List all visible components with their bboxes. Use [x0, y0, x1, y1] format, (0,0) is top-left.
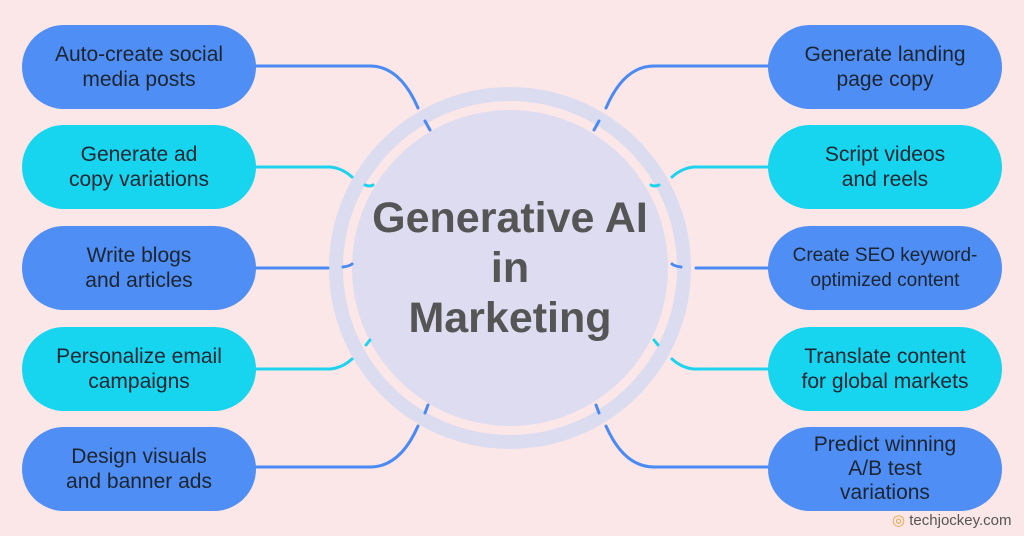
title: Marketing: [408, 294, 612, 342]
box: email: [22, 327, 256, 411]
box: email: Personalize email: [56, 345, 222, 368]
box: SEO: Create SEO keyword-: [793, 245, 977, 266]
box: blogs: [22, 226, 256, 310]
box: videos: and reels: [842, 168, 928, 191]
box: A/B: Predict winning: [814, 433, 956, 456]
logo: ◎ techjockey.com: [892, 512, 1012, 529]
box: email: campaigns: [88, 370, 190, 393]
outer ring: [336, 94, 684, 442]
box: ad copy: [22, 125, 256, 209]
title: [372, 194, 648, 342]
box: social posts: media posts: [82, 68, 196, 91]
box: landing page: page copy: [837, 68, 933, 91]
box: visuals: and banner ads: [66, 470, 212, 493]
box: A/B: [768, 427, 1002, 511]
box: A/B: variations: [840, 481, 930, 504]
box: visuals: [22, 427, 256, 511]
inner disk: [352, 110, 668, 426]
box: social posts: [22, 25, 256, 109]
box: ad copy: copy variations: [69, 168, 209, 191]
box: translate: Translate content: [804, 345, 966, 368]
box: landing page: [768, 25, 1002, 109]
box: blogs: and articles: [85, 269, 193, 292]
box: landing page: Generate landing: [804, 43, 966, 66]
box: SEO: optimized content: [811, 270, 959, 291]
box: blogs: Write blogs: [87, 244, 191, 267]
title: in: [491, 244, 529, 292]
box: videos: Script videos: [825, 143, 945, 166]
box: ad copy: Generate ad: [81, 143, 197, 166]
box: videos: [768, 125, 1002, 209]
title: Generative AI: [372, 194, 648, 242]
box: SEO: [768, 226, 1002, 310]
box: A/B: A/B test: [848, 457, 922, 480]
box: social posts: Auto-create social: [55, 43, 223, 66]
box: visuals: Design visuals: [71, 445, 207, 468]
box: translate: [768, 327, 1002, 411]
box: translate: for global markets: [802, 370, 968, 393]
